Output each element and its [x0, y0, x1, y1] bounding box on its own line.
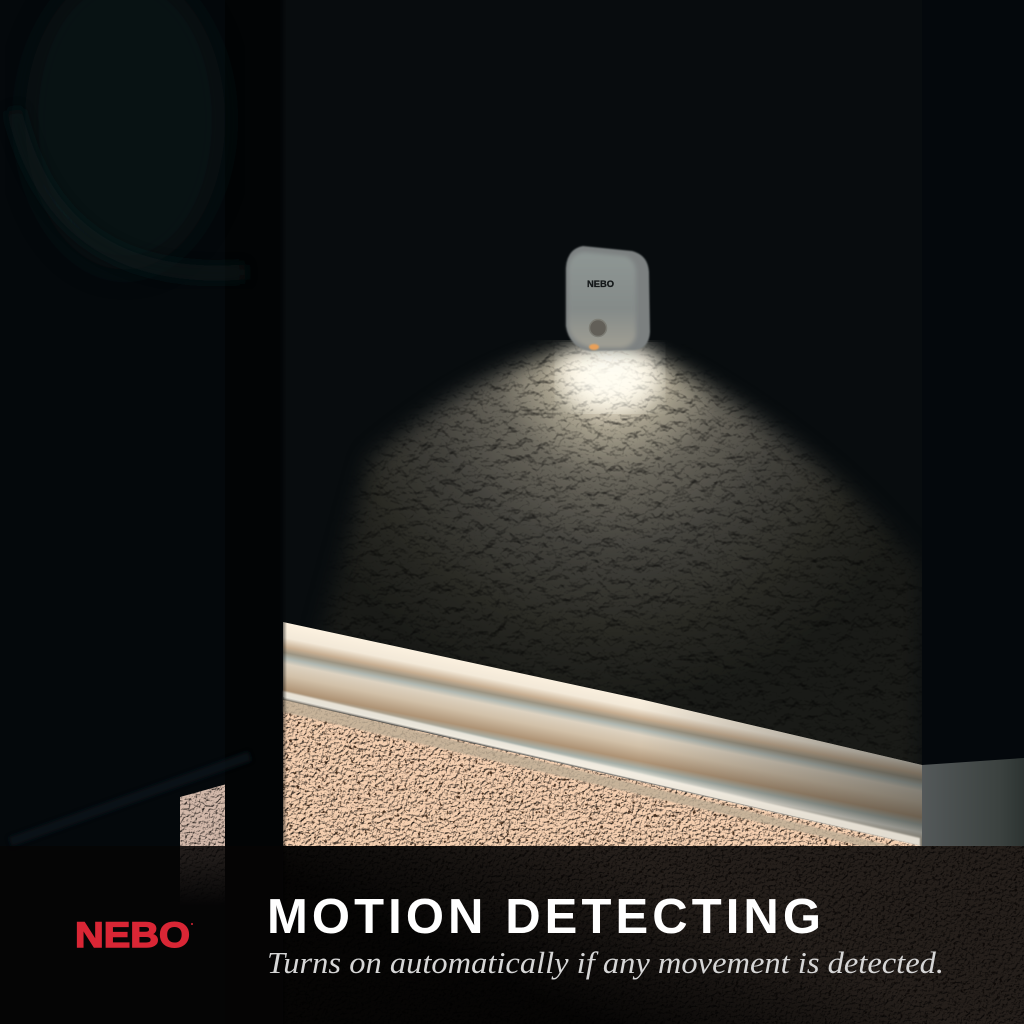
pool of light on textured wall — [324, 340, 922, 764]
motion sensor night light device — [566, 246, 650, 351]
caption banner — [0, 846, 1024, 1024]
carpet — [283, 700, 1024, 1024]
foreground door frame silhouette — [0, 0, 287, 1024]
NEBO brand logo: NEBO — [75, 916, 190, 955]
motion sensor lens — [590, 320, 606, 336]
wall surface in shadow — [283, 0, 1024, 780]
baseboard lit section — [283, 622, 922, 846]
subheading: Turns on automatically if any movement is detected. — [267, 945, 944, 980]
device logo: NEBO — [587, 279, 614, 290]
heading: MOTION DETECTING — [267, 890, 821, 944]
amber indicator — [589, 344, 599, 350]
light source hot spot — [564, 348, 656, 408]
small carpet patch beyond door — [180, 782, 225, 906]
baseboard around the corner — [922, 758, 1024, 846]
